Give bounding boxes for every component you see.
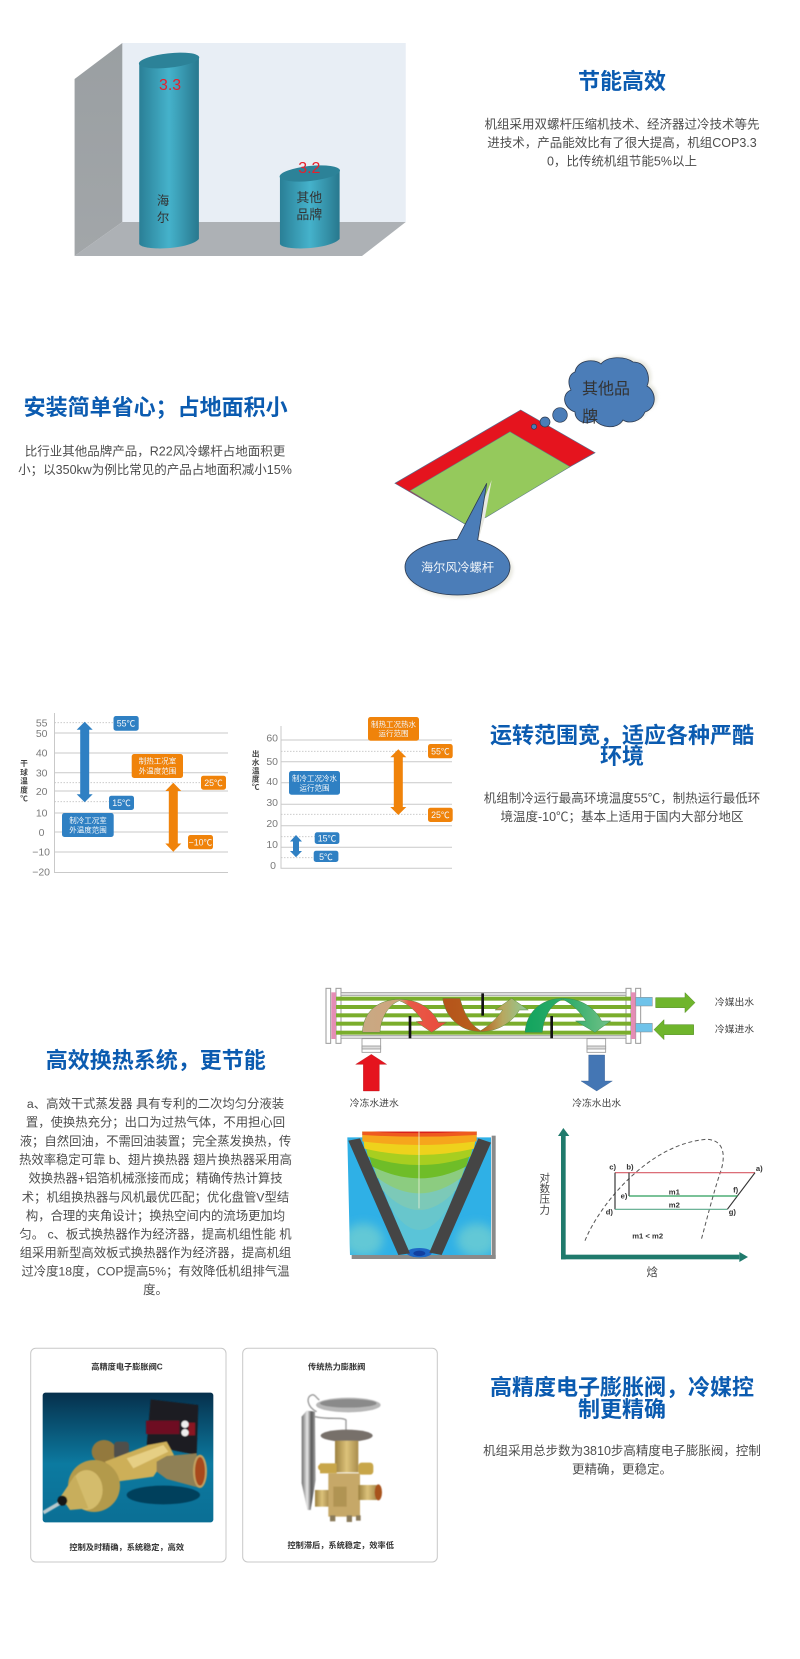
badge: 15 xyxy=(109,796,134,810)
text block: heat exchange: 效换热器+铝箔机械涨接而成；精确传热计算技 xyxy=(28,1171,283,1186)
text block: operating range xyxy=(484,790,760,824)
text block: energy efficiency: 0，比传统机组节能5%以上 xyxy=(547,154,697,168)
point labels xyxy=(606,1162,763,1241)
thought cloud: other brands xyxy=(565,356,657,427)
bar: Haier 3.3 xyxy=(138,50,200,248)
axis title: ℃ xyxy=(252,782,260,792)
text block: heat exchange: 置，使换热充分；出口为过热气体，不用担心回 xyxy=(26,1115,285,1130)
point labels: b) xyxy=(626,1162,634,1171)
badge: 55 xyxy=(114,716,139,731)
nozzles xyxy=(362,1039,606,1052)
text block: installation xyxy=(18,444,292,477)
photo: thermal valve xyxy=(302,1395,382,1522)
box: chilled water range: 运行范围 xyxy=(300,782,330,792)
bar: other brands 3.2 xyxy=(279,160,341,248)
text block: energy efficiency: 机组采用双螺杆压缩机技术、经济器过冷技术等先 xyxy=(484,116,760,132)
chart: outlet water temperature range xyxy=(252,717,453,872)
axis tick labels xyxy=(266,732,278,872)
axes xyxy=(558,1128,748,1262)
point labels: m2 xyxy=(669,1201,680,1210)
text block: heat exchange: 匀。 c、板式换热器作为经济器，提高机组性能 机 xyxy=(19,1226,292,1241)
box: heating ambient range: 制热工况室 xyxy=(139,756,177,766)
axis tick labels: 20 xyxy=(36,786,48,798)
badge: 25 xyxy=(428,808,453,822)
text block: heat exchange: 构，合理的夹角设计；换热空间内的流场更加均 xyxy=(26,1208,285,1223)
flow arrow 3 xyxy=(525,998,611,1032)
cycle lines xyxy=(615,1173,755,1209)
box: chilled water range xyxy=(289,771,340,795)
box: cooling ambient range: 制冷工况室 xyxy=(69,815,107,825)
axis tick labels: 30 xyxy=(266,797,278,809)
badge: -10 xyxy=(188,835,213,849)
footprint: other brands xyxy=(395,410,595,524)
text block: expansion valve xyxy=(483,1443,761,1476)
axis title: 干 xyxy=(20,759,28,768)
arrow: chilled water range xyxy=(290,835,302,857)
point labels: m1 < m2 xyxy=(632,1232,663,1241)
point labels: f) xyxy=(733,1186,739,1195)
text block: operating range: 机组制冷运行最高环境温度55℃，制热运行最低环 xyxy=(484,790,760,806)
heading: energy efficiency: 节能高效 xyxy=(578,69,666,94)
section: heat exchange system xyxy=(19,988,763,1297)
axis title: 度 xyxy=(252,774,260,784)
arrow: refrigerant out xyxy=(656,993,695,1013)
axis title: 水 xyxy=(252,757,260,767)
thought bubbles xyxy=(531,408,567,429)
text block: installation: 比行业其他品牌产品，R22风冷螺杆占地面积更 xyxy=(25,444,286,458)
footprint comparison diagram xyxy=(395,356,657,598)
footprint: Haier xyxy=(410,432,570,524)
badge: 55: 55℃ xyxy=(431,746,450,756)
badge: 25 xyxy=(201,776,226,790)
axis tick labels: 55 xyxy=(36,718,48,730)
box: cooling ambient range xyxy=(62,813,114,837)
V coil airflow simulation xyxy=(343,1132,497,1259)
card: electronic expansion valve xyxy=(31,1348,226,1562)
badge: 55 xyxy=(428,744,453,758)
section: easy installation xyxy=(18,356,657,598)
point labels: e) xyxy=(621,1191,628,1200)
axis tick labels: 20 xyxy=(266,818,278,830)
callout: Haier air-cooled screw xyxy=(405,480,513,598)
coil bars xyxy=(348,1138,491,1255)
baffles xyxy=(409,993,553,1038)
badge: 25: 25℃ xyxy=(204,778,223,788)
flow arrow 1 xyxy=(362,999,447,1032)
axis tick labels: 50 xyxy=(36,728,48,740)
point labels: d) xyxy=(606,1207,613,1216)
text block: heat exchange xyxy=(19,1096,292,1297)
card: electronic expansion valve: 高精度电子膨胀阀C xyxy=(91,1362,163,1372)
pressure-enthalpy diagram xyxy=(558,1128,763,1262)
box: hot water range: 运行范围 xyxy=(378,728,408,738)
axis tick labels: −20 xyxy=(32,866,50,878)
heading: heat exchange: 高效换热系统，更节能 xyxy=(46,1048,266,1073)
arrow: heating range xyxy=(165,783,181,852)
bar: other brands 3.2: 3.2 xyxy=(298,160,320,177)
3D bar chart xyxy=(75,43,406,256)
box: hot water range: 制热工况热水 xyxy=(371,719,416,729)
box: heating ambient range: 外温度范围 xyxy=(139,766,176,776)
heading: expansion valve: 高精度电子膨胀阀，冷媒控 xyxy=(490,1375,754,1400)
label: refrigerant out: 冷媒出水 xyxy=(715,996,754,1008)
evaporator shell xyxy=(326,988,641,1043)
box: chilled water range: 制冷工况冷水 xyxy=(292,773,337,783)
axis title: log pressure xyxy=(539,1172,550,1216)
thought cloud: other brands: 牌 xyxy=(582,408,598,426)
point labels: g) xyxy=(729,1207,736,1216)
badge: 15 xyxy=(315,832,339,844)
axis tick labels: 0 xyxy=(270,860,276,872)
axis tick labels: −10 xyxy=(32,846,50,858)
axis tick labels xyxy=(32,718,50,878)
axis title: ℃ xyxy=(20,794,28,803)
point labels: m1 xyxy=(669,1187,681,1196)
text block: heat exchange: 术；机组换热器与风机最优匹配；优化盘管V型结 xyxy=(22,1189,289,1204)
box: heating ambient range xyxy=(132,754,183,778)
axis title: log pressure: 力 xyxy=(539,1204,550,1216)
point labels: a) xyxy=(756,1164,763,1173)
card: thermal expansion valve xyxy=(243,1348,437,1562)
arrow: cooling range xyxy=(77,722,93,802)
callout: Haier air-cooled screw: 海尔风冷螺杆 xyxy=(421,560,494,574)
card: electronic expansion valve: 控制及时精确，系统稳定，高效 xyxy=(69,1542,184,1552)
text block: energy efficiency: 进技术，产品能效比有了很大提高，机组COP3.3 xyxy=(487,135,757,150)
flow arrow 2 xyxy=(443,998,528,1032)
heading: operating range xyxy=(490,723,754,769)
section: energy efficiency xyxy=(75,43,760,256)
section: wide operating range xyxy=(20,713,760,878)
heading: operating range: 运转范围宽，适应各种严酷 xyxy=(490,723,754,748)
text block: installation: 小；以350kw为例比常见的产品占地面积减小15% xyxy=(18,462,292,477)
text block: operating range: 境温度-10℃；基本上适用于国内大部分地区 xyxy=(500,809,744,824)
box: cooling ambient range: 外温度范围 xyxy=(69,824,107,834)
axis tick labels: 10 xyxy=(36,808,48,820)
badge: 15: 15℃ xyxy=(112,798,131,808)
axis title: log pressure: 对 xyxy=(539,1172,550,1184)
bar: other brands 3.2: 品牌 xyxy=(296,207,322,222)
saturation dome xyxy=(585,1139,723,1241)
text block: heat exchange: 液；自然回油，不需回油装置；完全蒸发换热，传 xyxy=(20,1133,291,1148)
bar: Haier 3.3: 海 xyxy=(157,193,169,208)
axis title xyxy=(20,759,28,803)
bar: Haier 3.3: 尔 xyxy=(157,210,169,225)
photo: electronic valve xyxy=(43,1393,213,1522)
heading: operating range: 环境 xyxy=(600,744,644,769)
shell and tube evaporator diagram xyxy=(326,988,695,1091)
arrow: refrigerant in xyxy=(654,1020,694,1040)
bar: Haier 3.3: 3.3 xyxy=(159,77,181,94)
thought cloud: other brands: 其他品 xyxy=(582,380,630,398)
section: electronic expansion valve xyxy=(31,1348,761,1562)
axis title: 温 xyxy=(252,766,260,776)
axis tick labels: 10 xyxy=(266,839,278,851)
axis title: 度 xyxy=(20,784,28,794)
axis title: 球 xyxy=(20,767,28,777)
text block: energy efficiency xyxy=(484,116,760,168)
label: refrigerant in: 冷媒进水 xyxy=(715,1022,754,1036)
axis tick labels: 40 xyxy=(266,776,278,788)
axis title: enthalpy: 焓 xyxy=(647,1265,659,1279)
axis tick labels: 60 xyxy=(266,732,278,744)
axis title: 出 xyxy=(252,748,259,758)
axis title: log pressure: 数 xyxy=(539,1182,550,1195)
text block: heat exchange: 过冷度18度，COP提高5%；有效降低机组排气温 xyxy=(21,1264,290,1279)
badge: 55: 55℃ xyxy=(117,718,135,728)
text block: expansion valve: 更精确，更稳定。 xyxy=(572,1462,672,1476)
text block: expansion valve: 机组采用总步数为3810步高精度电子膨胀阀，控制 xyxy=(483,1443,761,1458)
badge: 5: 5℃ xyxy=(319,852,333,862)
axis tick labels: 40 xyxy=(36,748,48,760)
badge: -10: −10℃ xyxy=(189,838,213,848)
refrigerant stubs xyxy=(636,997,652,1032)
heading: expansion valve: 制更精确 xyxy=(578,1397,666,1422)
text block: heat exchange: 热效率稳定可靠 b、翅片换热器 翅片换热器采用高 xyxy=(19,1152,292,1167)
arrow: chilled water out xyxy=(581,1055,612,1091)
arrow: hot water range xyxy=(390,749,406,815)
axis tick labels: 0 xyxy=(39,827,45,839)
axis title xyxy=(252,748,260,792)
text block: heat exchange: 组采用新型高效板式换热器作为经济器，提高机组 xyxy=(20,1245,291,1260)
label: chilled water in: 冷冻水进水 xyxy=(350,1096,399,1110)
heading: installation: 安装简单省心；占地面积小 xyxy=(24,395,288,420)
text block: heat exchange: 度。 xyxy=(143,1282,168,1297)
chart: ambient temperature range xyxy=(20,713,228,878)
card: thermal expansion valve: 传统热力膨胀阀 xyxy=(308,1362,365,1372)
badge: 5 xyxy=(314,851,338,862)
point labels: c) xyxy=(609,1162,617,1171)
box: hot water range xyxy=(368,717,419,741)
text block: heat exchange: a、高效干式蒸发器 具有专利的二次均匀分液装 xyxy=(27,1096,284,1111)
axis tick labels: 30 xyxy=(36,768,48,780)
label: chilled water out: 冷冻水出水 xyxy=(572,1096,621,1110)
bar: other brands 3.2: 其他 xyxy=(296,190,322,205)
arrow: chilled water in xyxy=(356,1054,387,1091)
badge: 15: 15℃ xyxy=(318,834,336,844)
badge: 25: 25℃ xyxy=(431,810,450,820)
heading: expansion valve xyxy=(490,1375,754,1422)
axis title: log pressure: 压 xyxy=(539,1194,550,1206)
card: thermal expansion valve: 控制滞后，系统稳定，效率低 xyxy=(287,1540,395,1550)
axis title: 温 xyxy=(20,776,28,786)
axis tick labels: 50 xyxy=(266,756,278,768)
